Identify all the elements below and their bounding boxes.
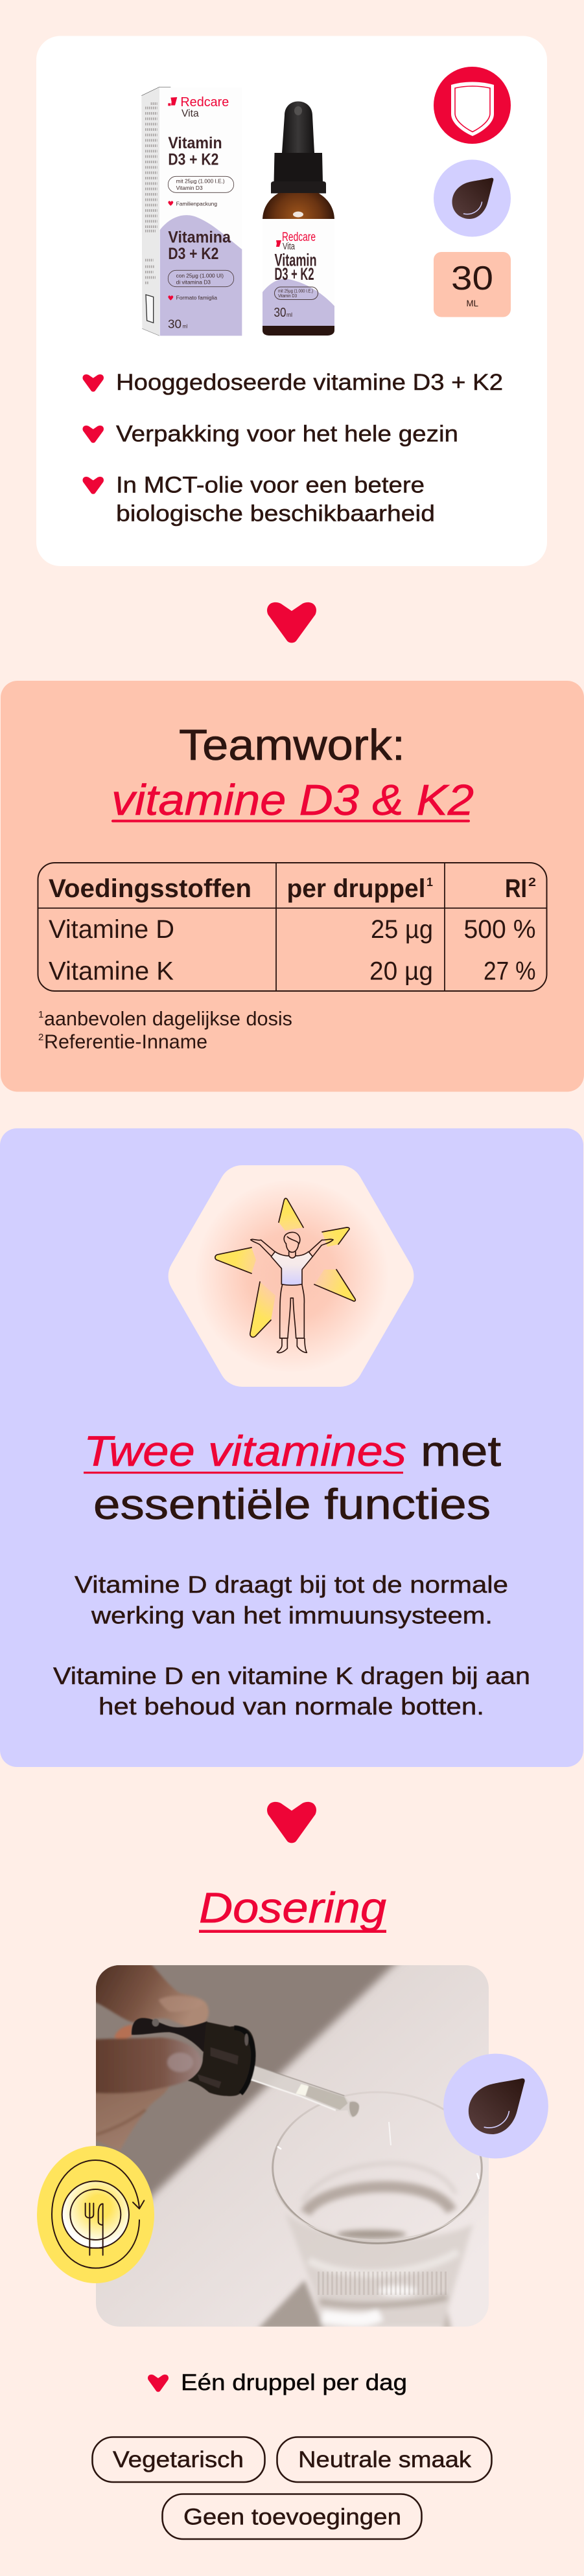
text: bones: Vitamine D en vitamine K dragen bij aan: [53, 1663, 530, 1689]
product box: Vita: [181, 108, 199, 119]
heading: two vitamins: essentiële functies: [93, 1480, 491, 1528]
footnotes: [38, 1007, 292, 1053]
text: bones: het behoud van normale botten.: [99, 1693, 484, 1720]
heading: two vitamins: [84, 1427, 501, 1528]
tag: neutral taste: [277, 2437, 491, 2482]
dropper bottle: mit 25µg (1.000 I.E.): [278, 288, 313, 294]
tag: no additives: [162, 2494, 421, 2539]
nutrition table: Vitamine K: [49, 957, 174, 986]
panel: teamwork: [1, 681, 584, 1092]
nutrition table: 2: [528, 876, 536, 889]
illustration: hexagon with figure and star: [192, 1180, 390, 1372]
product box: [141, 87, 242, 336]
nutrition table: 1: [426, 876, 433, 889]
dropper bottle: Redcare: [282, 231, 316, 244]
nutrition table: per druppel: [286, 874, 425, 903]
panel: product card: [36, 36, 547, 566]
dropper: [132, 2018, 360, 2117]
icon: plate with cutlery: [37, 2146, 154, 2283]
dropper bottle: ml: [286, 312, 292, 318]
icon: shield badge: [434, 67, 511, 144]
icon: drop badge on photo: [443, 2054, 548, 2158]
icon: heart divider: [267, 1802, 316, 1843]
footnotes: aanbevolen dagelijkse dosis: [44, 1007, 292, 1030]
icon: 30 ml badge: ML: [467, 298, 478, 308]
heading: two vitamins: Twee vitamines: [84, 1427, 406, 1475]
photo: dropper above glass: [78, 1956, 489, 2330]
product box: 30: [168, 317, 181, 331]
tag: vegetarian: Vegetarisch: [113, 2447, 244, 2472]
dropper bottle: D3 + K2: [275, 264, 314, 284]
text: immune system: werking van het immuunsysteem.: [91, 1602, 493, 1628]
nutrition table: 27 %: [484, 957, 535, 986]
product box: Vitamina: [168, 228, 231, 246]
nutrition table: Vitamine D: [49, 915, 174, 944]
tag: no additives: Geen toevoegingen: [183, 2504, 401, 2530]
heading: teamwork: Teamwork:: [179, 721, 405, 769]
icon: 30 ml badge: [434, 252, 511, 317]
dropper bottle: Vitamin: [275, 250, 316, 269]
footnotes: 2: [38, 1032, 43, 1043]
product box: ml: [183, 324, 188, 330]
nutrition table: RI: [505, 874, 527, 903]
product box: Formato famiglia: [176, 295, 217, 301]
dropper bottle: 30: [274, 306, 286, 320]
product box: di vitamina D3: [176, 279, 211, 285]
heading: dosage: Dosering: [199, 1884, 386, 1932]
hand: [89, 1963, 209, 2151]
nutrition table: 25 µg: [371, 915, 433, 944]
nutrition table: 500 %: [464, 915, 535, 944]
product box: D3 + K2: [168, 150, 218, 168]
product box: D3 + K2: [168, 245, 218, 263]
nutrition table: 20 µg: [369, 957, 433, 986]
nutrition table: [38, 863, 547, 991]
icon: 30 ml badge: 30: [451, 260, 493, 297]
nutrition table: Voedingsstoffen: [49, 874, 251, 903]
footnotes: Referentie-Inname: [44, 1030, 207, 1053]
tag: neutral taste: Neutrale smaak: [298, 2447, 472, 2472]
dropper bottle: [263, 101, 334, 336]
benefit: family pack: Verpakking voor het hele gezin: [116, 421, 458, 447]
product box: con 25µg (1.000 UI): [176, 272, 224, 279]
benefit: MCT oil: In MCT-olie voor een betere: [116, 473, 425, 497]
dropper bottle: Vita: [283, 241, 295, 252]
glass: [257, 2092, 482, 2330]
text: immune system: [75, 1571, 508, 1628]
dropper bottle: Vitamin D3: [278, 293, 297, 299]
benefit: MCT oil: biologische beschikbaarheid: [116, 501, 435, 526]
text: bones: [53, 1663, 530, 1720]
product box: Vitamin: [168, 134, 222, 152]
heading: two vitamins: met: [421, 1427, 501, 1475]
heading: teamwork: vitamine D3 & K2: [111, 776, 474, 825]
heading: teamwork: [111, 721, 474, 825]
text: immune system: Vitamine D draagt bij tot de normale: [75, 1571, 508, 1598]
product box: mit 25µg (1.000 I.E.): [176, 178, 225, 185]
dosage line: Eén druppel per dag: [181, 2370, 407, 2395]
benefit: high dose: Hooggedoseerde vitamine D3 + K2: [116, 370, 503, 395]
icon: heart divider: [267, 602, 316, 643]
benefit: MCT oil: [83, 473, 435, 526]
panel: two vitamins: [0, 1128, 583, 1767]
product box: Familienpackung: [176, 200, 217, 207]
footnotes: 1: [38, 1009, 43, 1020]
tag: vegetarian: [92, 2437, 264, 2482]
product box: Redcare: [180, 95, 229, 109]
figure: [251, 1232, 333, 1353]
product box: Vitamin D3: [176, 185, 203, 191]
icon: drop badge: [434, 159, 511, 237]
